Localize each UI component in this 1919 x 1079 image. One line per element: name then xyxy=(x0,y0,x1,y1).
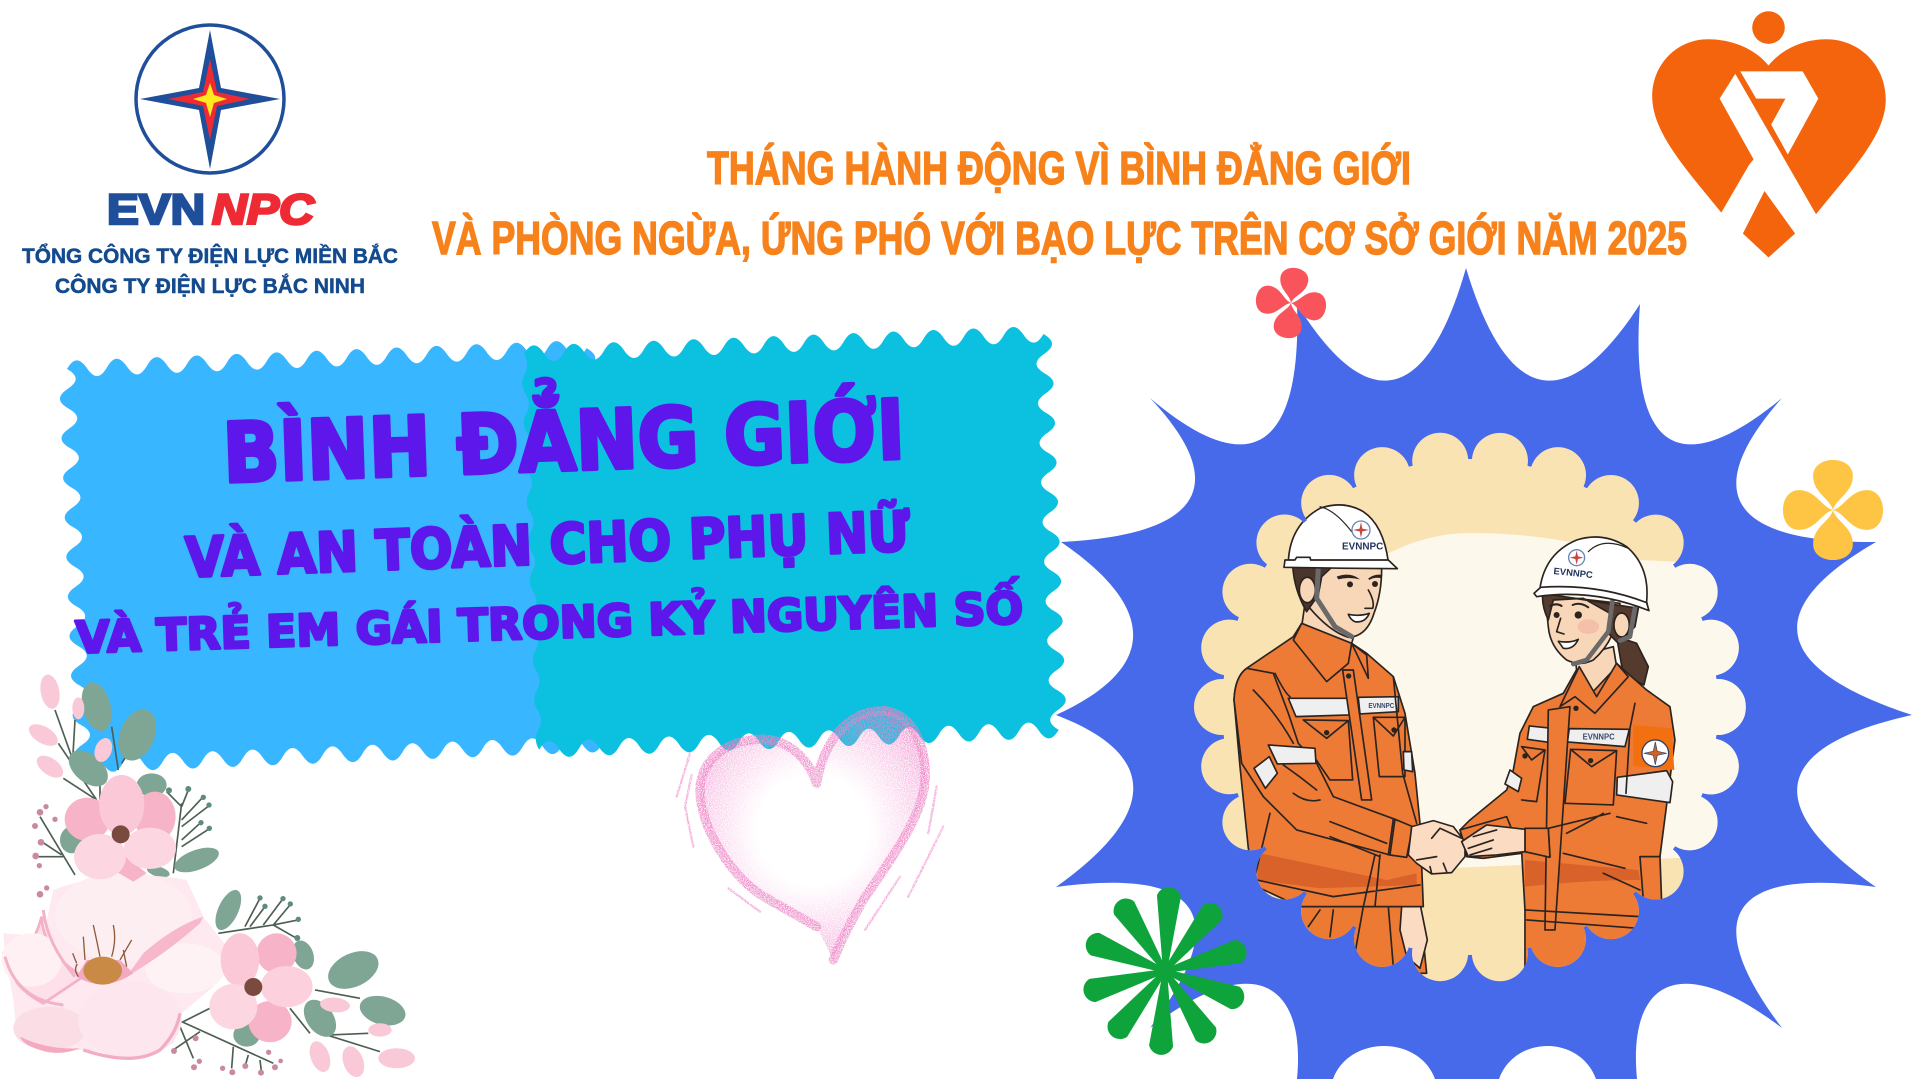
cream scalloped circle xyxy=(1222,459,1718,955)
man name tag: EVNNPC xyxy=(1368,701,1395,710)
man neck xyxy=(1302,603,1357,657)
panel: teal scalloped banner right xyxy=(521,325,1067,758)
icon: green asterisk xyxy=(1081,886,1249,1056)
woman name tag: EVNNPC xyxy=(1583,732,1615,741)
logo wordmark NPC: NPC xyxy=(212,186,315,234)
stem berries xyxy=(32,804,283,1076)
ivory backdrop xyxy=(1352,533,1745,868)
man sleeve xyxy=(1234,668,1412,857)
floral corner decoration xyxy=(2,673,415,1079)
woman armband patch xyxy=(1633,725,1674,770)
icon: EVN emblem xyxy=(136,25,284,173)
panel: blue scalloped banner left xyxy=(58,340,611,773)
woman pockets and placket xyxy=(1545,707,1570,930)
icon: pink chalk heart xyxy=(677,711,943,960)
pink flower lower xyxy=(209,933,313,1042)
woman neck xyxy=(1575,647,1617,697)
company name line 2: CÔNG TY ĐIỆN LỰC BẮC NINH xyxy=(55,274,365,298)
heading line 3: VÀ TRẺ EM GÁI TRONG KỶ NGUYÊN SỐ xyxy=(75,576,1024,664)
woman jacket xyxy=(1460,663,1675,973)
woman helmet xyxy=(1536,537,1648,610)
man chest stripes xyxy=(1288,698,1349,717)
panel: EVNNPC logo xyxy=(22,25,398,298)
icon: blue starburst xyxy=(1056,268,1912,1079)
woman ponytail xyxy=(1617,637,1648,685)
woman stripes xyxy=(1526,725,1548,743)
large magnolia xyxy=(2,872,227,1058)
man hand and trousers xyxy=(1293,903,1427,973)
stems xyxy=(35,710,380,1073)
man helmet xyxy=(1288,505,1388,562)
handshake xyxy=(1408,817,1550,874)
icon: yellow clover xyxy=(1783,460,1883,560)
title xyxy=(432,142,1687,264)
company name line 1: TỔNG CÔNG TY ĐIỆN LỰC MIỀN BẮC xyxy=(22,244,398,268)
pink flower upper xyxy=(65,775,176,882)
icon: red clover xyxy=(1251,263,1331,343)
banner heading xyxy=(75,365,1024,664)
man head xyxy=(1310,569,1382,638)
man jacket xyxy=(1234,623,1423,907)
man xyxy=(1234,505,1427,973)
icon: orange heart ribbon logo xyxy=(1652,11,1886,257)
woman collar xyxy=(1560,663,1628,713)
heading line 2: VÀ AN TOÀN CHO PHỤ NỮ xyxy=(184,499,911,590)
buds xyxy=(25,673,415,1079)
man collar xyxy=(1293,623,1368,682)
woman: EVNNPC xyxy=(1553,566,1594,580)
title line 1: THÁNG HÀNH ĐỘNG VÌ BÌNH ĐẲNG GIỚI xyxy=(707,142,1411,194)
leaves xyxy=(60,679,409,1047)
woman head xyxy=(1545,595,1620,663)
heading line 1: BÌNH ĐẲNG GIỚI xyxy=(221,365,906,502)
illustration: two workers shaking hands xyxy=(1234,505,1745,973)
logo wordmark EVN: EVN xyxy=(107,186,205,234)
woman xyxy=(1460,537,1675,973)
woman sleeve xyxy=(1525,813,1660,900)
man: EVNNPC xyxy=(1342,541,1383,552)
man placket and pockets xyxy=(1343,670,1372,800)
